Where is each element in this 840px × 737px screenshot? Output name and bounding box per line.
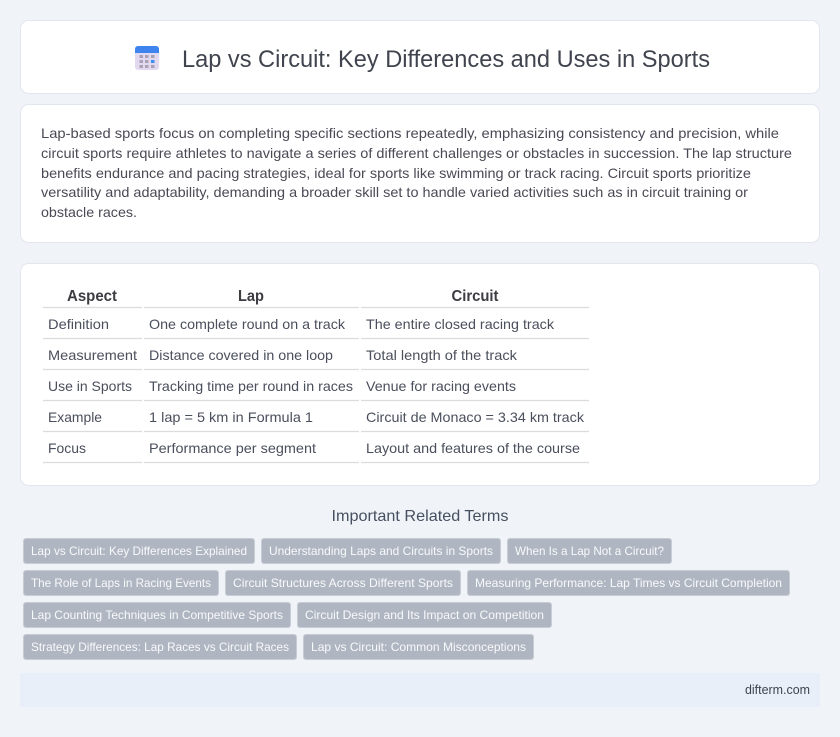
table row: use in sports [48,378,516,394]
table row: example: 1 lap = 5 km in Formula 1 [149,409,313,425]
text block: introduction: versatility and adaptability, demanding a broader skill set to handle varied activities such as in circuit training or [41,184,748,200]
icon: calendar [135,46,159,70]
tag: Circuit Design and Its Impact on Competition [305,608,544,622]
table row: focus: Layout and features of the course [366,440,580,456]
table row: definition [48,316,555,332]
table row: example: Example [48,409,102,425]
text block: introduction [41,125,792,220]
tag: Lap vs Circuit: Key Differences Explained [31,544,247,558]
table row: use in sports: Tracking time per round in races [149,378,353,394]
footer: difterm.com [745,683,810,697]
table row: focus: Focus [48,440,86,456]
tag: The Role of Laps in Racing Events [31,576,211,590]
table row: definition: Definition [48,316,109,332]
table row: focus [48,440,580,456]
table header: Circuit [452,288,499,305]
text block: introduction: benefits endurance and pacing strategies, ideal for sports like swimming or track racing. Circuit sports prioritize [41,165,751,181]
tag [298,602,552,628]
table row: measurement: Distance covered in one loop [149,347,333,363]
panel: header [20,20,820,94]
table header: Lap [238,288,264,305]
text block: introduction: obstacle races. [41,204,137,220]
text block: introduction: Lap-based sports focus on completing specific sections repeatedly, emphasizing consistency and precision, while [41,125,779,141]
table row: focus: Performance per segment [149,440,316,456]
table header [67,288,499,305]
table row: use in sports: Use in Sports [48,378,132,394]
table row: definition: The entire closed racing track [366,316,555,332]
tag [226,570,460,596]
table row: example [48,409,585,425]
panel: introduction [20,104,820,242]
tag [468,570,790,596]
tag: Lap vs Circuit: Common Misconceptions [311,640,526,654]
title: Lap vs Circuit: Key Differences and Uses in Sports [182,46,710,73]
tag [262,538,500,564]
panel: comparison table [20,264,820,486]
table row: measurement: Total length of the track [366,347,518,363]
table header: Aspect [67,288,118,305]
table row: measurement: Measurement [48,347,137,363]
table row: definition: One complete round on a track [149,316,346,332]
tag: Understanding Laps and Circuits in Sports [269,544,493,558]
tag: Strategy Differences: Lap Races vs Circuit Races [31,640,289,654]
tags: related terms [24,538,790,660]
tag [24,538,254,564]
tag: Lap Counting Techniques in Competitive Sports [31,608,283,622]
table row: measurement [48,347,518,363]
tag [304,634,534,660]
heading: related terms: Important Related Terms [332,508,508,525]
tag [24,570,218,596]
table row: use in sports: Venue for racing events [366,378,516,394]
tag [508,538,672,564]
tag [24,634,296,660]
text block: introduction: circuit sports require athletes to navigate a series of different challenges or obstacles in succession. The lap structure [41,145,792,161]
tag: When Is a Lap Not a Circuit? [515,544,664,558]
footer [20,673,820,707]
table row: example: Circuit de Monaco = 3.34 km track [366,409,585,425]
tag [24,602,290,628]
tag: Circuit Structures Across Different Sports [233,576,453,590]
tag: Measuring Performance: Lap Times vs Circuit Completion [475,576,782,590]
